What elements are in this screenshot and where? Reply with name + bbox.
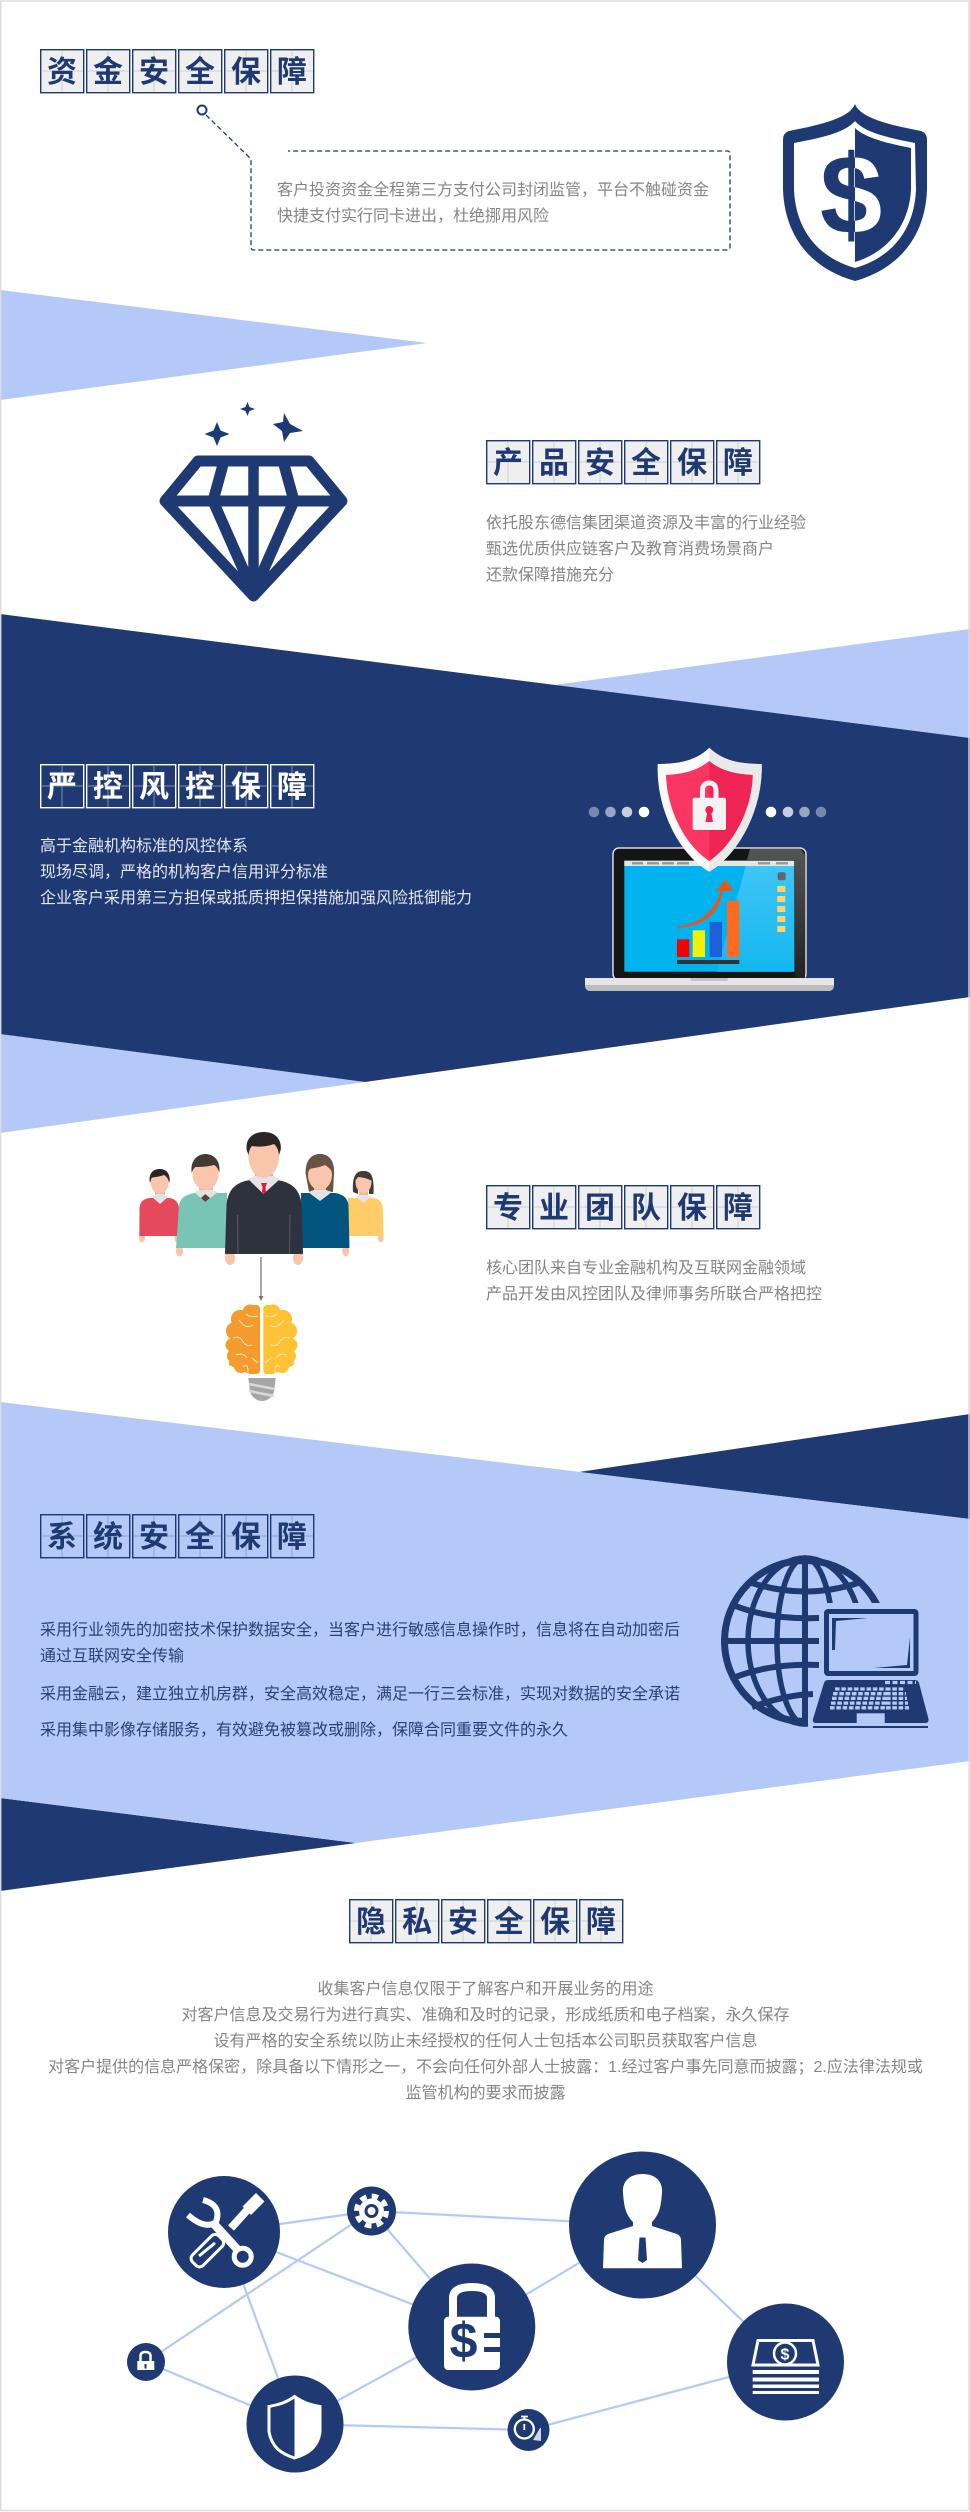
person: red sweater (139, 1169, 180, 1242)
text: privacy: 设有严格的安全系统以防止未经授权的任何人士包括本公司职员获取客户信息 (213, 2032, 758, 2050)
shield (658, 748, 762, 872)
background: light triangle right of navy band (554, 629, 970, 738)
heading: team: 专 (493, 1192, 523, 1225)
text: privacy (48, 1980, 923, 2102)
heading: product safety: 全 (631, 447, 661, 480)
person: blue sweater (301, 1154, 350, 1256)
heading: privacy: 隐 (356, 1906, 386, 1939)
icon: dollar shield (783, 104, 927, 281)
text: product safety (486, 514, 806, 584)
node: gear (347, 2186, 396, 2236)
heading: risk control: 风 (139, 771, 169, 804)
heading: system safety: 障 (277, 1521, 307, 1554)
heading: privacy: 全 (494, 1906, 524, 1939)
text: team: 核心团队来自专业金融机构及互联网金融领域 (486, 1259, 806, 1277)
background: light triangle left below navy band (0, 1034, 365, 1133)
icon: dollar shield: $ (820, 132, 882, 257)
arrow: team to idea (258, 1257, 264, 1301)
diagram: security network (127, 2152, 844, 2472)
heading: privacy: 障 (586, 1906, 616, 1939)
background: navy triangle left below light band (0, 1798, 356, 1891)
text: product safety: 甄选优质供应链客户及教育消费场景商户 (486, 539, 774, 558)
text: privacy: 对客户提供的信息严格保密，除具备以下情形之一，不会向任何外部人士披露：1.经过客户事先同意而披露；2.应法律法规或 (48, 2057, 923, 2076)
node: small padlock (127, 2343, 165, 2381)
text: privacy: 对客户信息及交易行为进行真实、准确和及时的记录，形成纸质和电子档案，永久保存 (181, 2006, 790, 2024)
heading: risk control (41, 765, 314, 808)
text: system safety (40, 1621, 680, 1739)
person: teal sweater (176, 1154, 227, 1256)
heading: system safety: 安 (139, 1521, 169, 1554)
heading: funds safety: 全 (185, 56, 215, 89)
callout: dashed connector and frame (198, 106, 730, 250)
text: funds safety: 快捷支付实行同卡进出，杜绝挪用风险 (277, 207, 549, 225)
text: funds safety (277, 181, 709, 225)
text: product safety: 还款保障措施充分 (486, 566, 614, 584)
illustration: team (139, 1132, 384, 1265)
text: system safety: 采用行业领先的加密技术保护数据安全，当客户进行敏感信息操作时，信息将在自动加密后 (40, 1621, 680, 1639)
heading: team: 保 (677, 1192, 707, 1225)
heading: system safety (41, 1515, 314, 1558)
heading: product safety: 品 (539, 447, 569, 480)
text: risk control: 企业客户采用第三方担保或抵质押担保措施加强风险抵御能力 (40, 889, 472, 907)
node: stopwatch (508, 2409, 550, 2451)
heading: system safety: 系 (47, 1521, 77, 1554)
icon: diamond with stars (165, 402, 342, 600)
heading: privacy: 保 (540, 1906, 570, 1939)
heading: product safety (487, 441, 760, 484)
node: money stack: $ (781, 2346, 790, 2364)
text: risk control: 高于金融机构标准的风控体系 (40, 837, 248, 855)
heading: privacy (350, 1900, 623, 1943)
heading: funds safety: 安 (139, 56, 169, 89)
background: light triangle top (0, 290, 427, 400)
panel: light blue band (0, 1402, 970, 1843)
heading: privacy: 安 (448, 1906, 478, 1939)
heading: product safety: 安 (585, 447, 615, 480)
text: team (486, 1259, 822, 1303)
heading: privacy: 私 (402, 1906, 432, 1939)
node: person (569, 2152, 716, 2298)
person: centre man (225, 1132, 303, 1265)
text: privacy: 监管机构的要求而披露 (405, 2084, 566, 2102)
person: yellow sweater (348, 1171, 384, 1242)
node: shield (246, 2376, 344, 2472)
heading: product safety: 障 (723, 447, 753, 480)
text: system safety: 采用集中影像存储服务，有效避免被篡改或删除，保障合同重要文件的永久 (40, 1720, 568, 1739)
icon: brain light bulb (226, 1304, 298, 1401)
dots (589, 807, 826, 817)
text: system safety: 通过互联网安全传输 (40, 1647, 184, 1665)
heading: team: 业 (539, 1192, 569, 1225)
icon: globe with laptop (721, 1558, 929, 1728)
heading: team: 队 (631, 1192, 661, 1225)
heading: product safety: 保 (677, 447, 707, 480)
text: risk control (40, 837, 472, 907)
heading: team: 团 (585, 1192, 615, 1225)
heading: funds safety: 金 (93, 56, 123, 89)
chart bars (677, 939, 689, 957)
heading: risk control: 严 (47, 771, 77, 804)
background: navy triangle right of light band (579, 1414, 970, 1519)
heading: product safety: 产 (493, 447, 523, 480)
text: privacy: 收集客户信息仅限于了解客户和开展业务的用途 (317, 1980, 654, 1998)
network links (146, 2211, 786, 2430)
text: risk control: 现场尽调，严格的机构客户信用评分标准 (40, 863, 328, 881)
base (585, 978, 834, 991)
heading: risk control: 控 (185, 771, 215, 804)
icon: laptop with security shield (585, 748, 834, 991)
growth arrow (677, 890, 722, 927)
heading: funds safety: 保 (231, 56, 261, 89)
heading: risk control: 保 (231, 771, 261, 804)
heading: system safety: 保 (231, 1521, 261, 1554)
heading: team: 障 (723, 1192, 753, 1225)
panel: navy band (0, 614, 970, 1082)
node: money stack (727, 2304, 844, 2420)
icon: dollar shield: $ (820, 132, 882, 257)
heading: risk control: 障 (277, 771, 307, 804)
text: team: 产品开发由风控团队及律师事务所联合严格把控 (486, 1285, 822, 1303)
text: product safety: 依托股东德信集团渠道资源及丰富的行业经验 (486, 514, 806, 532)
text: system safety: 采用金融云，建立独立机房群，安全高效稳定，满足一行三会标准，实现对数据的安全承诺 (40, 1685, 680, 1703)
laptop body (613, 848, 806, 980)
node: tools (168, 2176, 280, 2288)
heading: system safety: 统 (93, 1521, 123, 1554)
heading: team (487, 1186, 760, 1229)
heading: funds safety: 资 (47, 56, 77, 89)
node: dollar padlock: $ (450, 2313, 478, 2369)
heading: funds safety: 障 (277, 56, 307, 89)
heading: risk control: 控 (93, 771, 123, 804)
text: funds safety: 客户投资资金全程第三方支付公司封闭监管，平台不触碰资金 (277, 181, 709, 199)
node: dollar padlock (408, 2264, 535, 2390)
heading: funds safety (41, 50, 314, 93)
heading: system safety: 全 (185, 1521, 215, 1554)
